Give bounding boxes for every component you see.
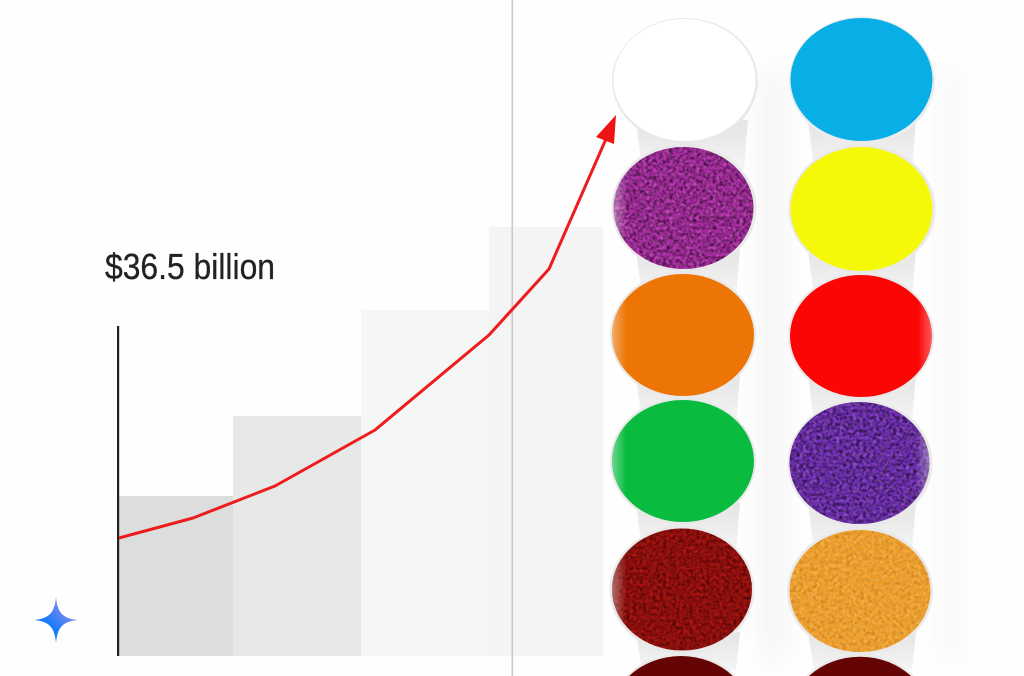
cup: orange <box>610 272 756 398</box>
bar 1 <box>118 496 233 656</box>
y axis <box>117 326 119 656</box>
bar chart <box>118 227 603 656</box>
cup: white <box>612 18 758 144</box>
cup: purple textured <box>788 400 932 528</box>
cup: yellow <box>788 144 936 274</box>
cup shadows <box>636 70 960 670</box>
cup: amber textured <box>787 527 933 655</box>
value label: $36.5 billion <box>105 246 275 287</box>
cup: maroon, cropped left <box>626 654 736 676</box>
bar 3 <box>361 310 489 656</box>
icon: sparkle <box>34 597 78 643</box>
red growth arrow <box>119 115 616 538</box>
cup: blue <box>789 17 935 144</box>
cup: dark red textured <box>610 526 754 654</box>
bar 2 <box>233 416 361 656</box>
bar 4 <box>489 227 603 656</box>
cup: red <box>788 272 934 400</box>
cup: maroon, cropped right <box>806 655 914 676</box>
vertical divider <box>512 0 513 676</box>
cup: magenta textured <box>612 144 756 272</box>
cup: green <box>610 398 756 524</box>
